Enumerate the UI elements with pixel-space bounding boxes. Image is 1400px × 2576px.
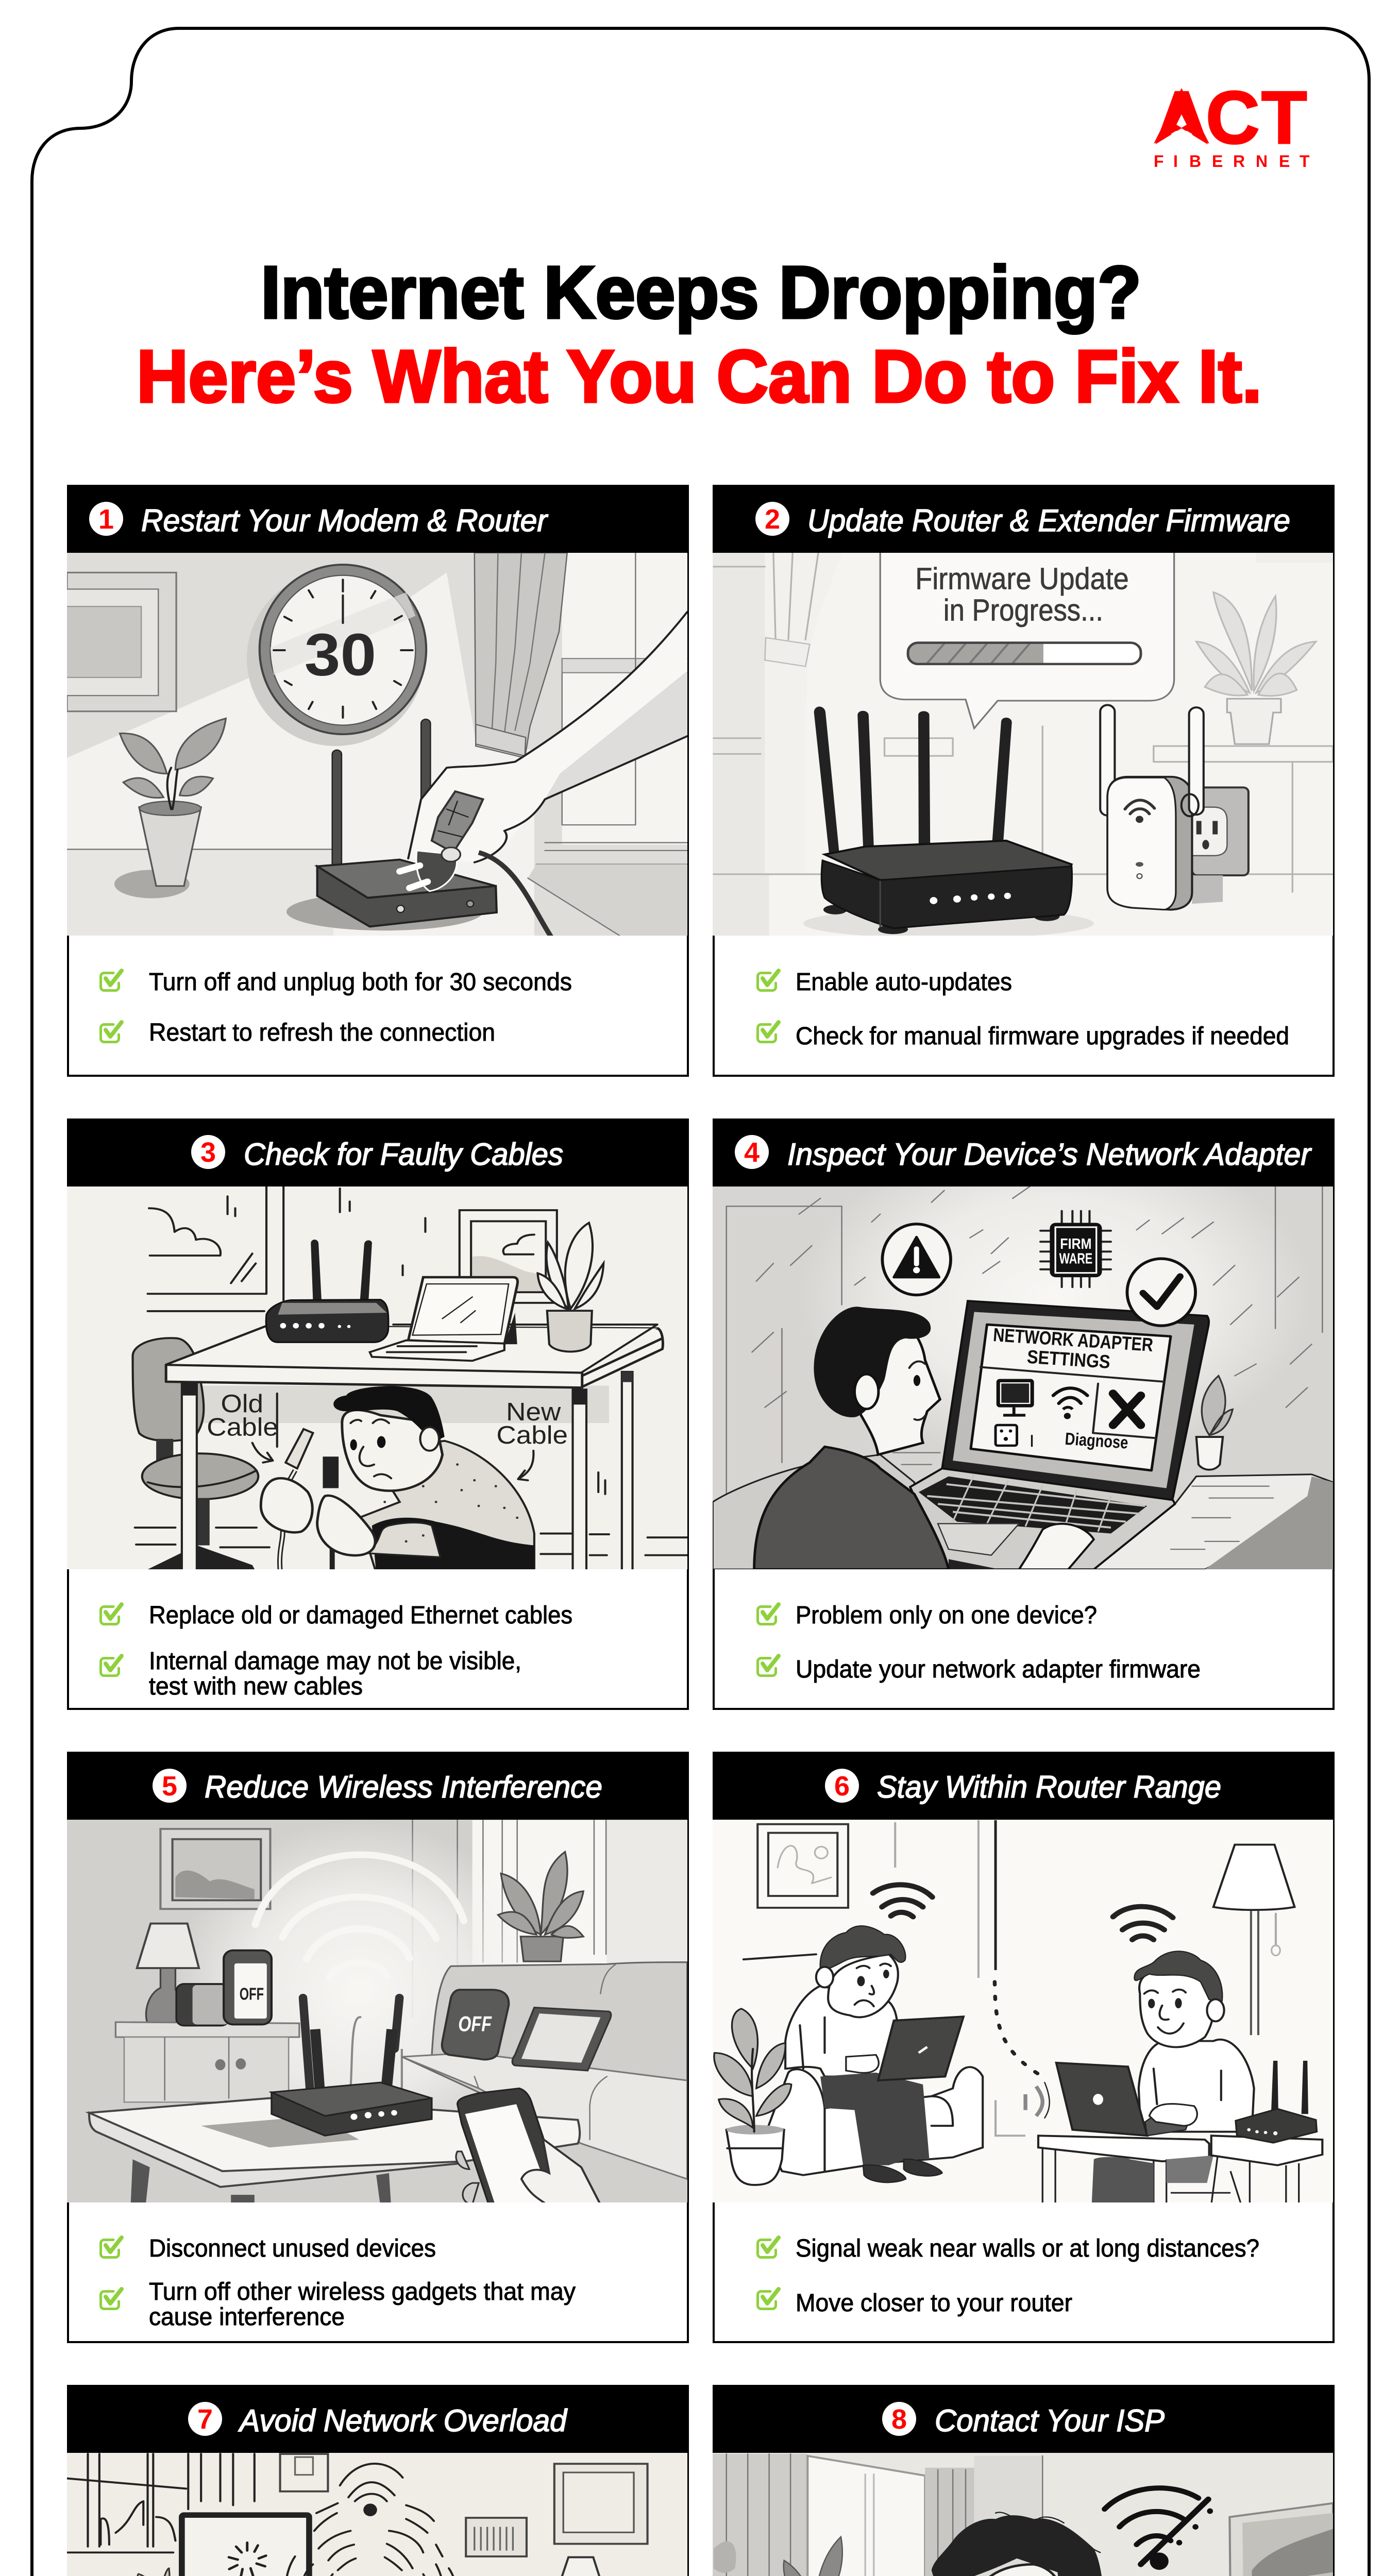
panel 8: contact ISP bbox=[701, 2385, 1385, 2576]
illustration: living room with router and wifi waves bbox=[52, 1816, 735, 2211]
panel 1: restart modem and router bbox=[52, 485, 735, 1076]
panel 1 header: 1 bbox=[98, 504, 114, 535]
panel 3 header: Check for Faulty Cables bbox=[244, 1137, 563, 1172]
bullet list bbox=[101, 1602, 572, 1700]
title: Internet Keeps Dropping? bbox=[261, 251, 1141, 334]
panel 4 header bbox=[713, 1118, 1335, 1187]
panel 7 header: Avoid Network Overload bbox=[238, 2403, 568, 2438]
bullet list: test with new cables bbox=[149, 1673, 363, 1700]
bullet list bbox=[101, 969, 572, 1046]
panel 6: router range bbox=[701, 1752, 1385, 2342]
panel 7: network overload bbox=[52, 2385, 735, 2576]
illustration: unplugging router with 30 second clock: 30 bbox=[305, 621, 376, 688]
title: Here’s What You Can Do to Fix It. bbox=[137, 335, 1262, 418]
illustration: living room with router and wifi waves: OFF bbox=[458, 2012, 492, 2036]
panel 7 header: 7 bbox=[197, 2404, 213, 2435]
bullet list: Move closer to your router bbox=[796, 2290, 1072, 2317]
logo: ACT Fibernet: FIBERNET bbox=[1154, 152, 1310, 171]
panel 8 header bbox=[713, 2385, 1335, 2453]
bullet list bbox=[757, 969, 1289, 1050]
bullet list: Replace old or damaged Ethernet cables bbox=[149, 1602, 572, 1629]
illustration: firmware update on router and extender: in Progress... bbox=[943, 594, 1103, 628]
panel 4 header: 4 bbox=[744, 1137, 760, 1168]
bullet list: Restart to refresh the connection bbox=[149, 1019, 495, 1046]
illustration: laptop with network adapter settings bbox=[713, 1187, 1333, 1569]
bullet list bbox=[101, 2235, 576, 2331]
panel 4 header: Inspect Your Device’s Network Adapter bbox=[787, 1137, 1312, 1172]
illustration: laptop with network adapter settings: SETTINGS bbox=[1026, 1346, 1111, 1373]
panel 5 header: 5 bbox=[162, 1771, 177, 1802]
illustration: person testing old and new cables under desk: Cable bbox=[496, 1421, 568, 1449]
panel 3: faulty cables bbox=[52, 1118, 735, 1709]
panel 2 header: 2 bbox=[765, 504, 780, 535]
bullet list bbox=[757, 1602, 1201, 1683]
illustration: laptop with network adapter settings: Diagnose bbox=[1064, 1429, 1129, 1452]
bullet list: Enable auto-updates bbox=[796, 969, 1012, 996]
bullet list: Signal weak near walls or at long distances? bbox=[796, 2235, 1259, 2262]
illustration: person testing old and new cables under desk: New bbox=[506, 1398, 561, 1426]
panel 6 header: 6 bbox=[834, 1771, 850, 1802]
illustration: firmware update on router and extender bbox=[713, 553, 1333, 936]
bullet list: Turn off and unplug both for 30 seconds bbox=[149, 969, 572, 996]
illustration: far and near router comparison bbox=[701, 1816, 1385, 2211]
panel 1 header bbox=[67, 485, 689, 553]
title bbox=[137, 251, 1262, 418]
panel 7 header bbox=[67, 2385, 689, 2453]
panel 3 header: 3 bbox=[200, 1137, 216, 1168]
panel 5: wireless interference bbox=[52, 1752, 735, 2342]
panel 2 header: Update Router & Extender Firmware bbox=[807, 503, 1290, 538]
panel 8 header: Contact Your ISP bbox=[935, 2403, 1165, 2438]
panel 4: network adapter bbox=[701, 1118, 1385, 1709]
bullet list: cause interference bbox=[149, 2303, 345, 2331]
illustration: person testing old and new cables under desk: Old bbox=[221, 1389, 263, 1417]
illustration: living room with router and wifi waves: OFF bbox=[240, 1985, 264, 2004]
panel 1 header: Restart Your Modem & Router bbox=[141, 503, 548, 538]
illustration: laptop with network adapter settings: NETWORK ADAPTER bbox=[992, 1324, 1154, 1356]
illustration: many devices around a router bbox=[52, 2450, 735, 2576]
illustration: firmware update on router and extender: Firmware Update bbox=[915, 562, 1129, 596]
bullet list: Check for manual firmware upgrades if needed bbox=[796, 1023, 1289, 1050]
panel 2 header bbox=[713, 485, 1335, 553]
panel 8 header: 8 bbox=[891, 2404, 907, 2435]
illustration: laptop with network adapter settings: FIRM bbox=[1060, 1236, 1092, 1252]
panel 6 header: Stay Within Router Range bbox=[877, 1770, 1221, 1804]
panel 5 header: Reduce Wireless Interference bbox=[205, 1770, 602, 1804]
panel 5 header bbox=[67, 1752, 689, 1820]
panel 3 header bbox=[67, 1118, 689, 1187]
bullet list: Problem only on one device? bbox=[796, 1602, 1097, 1629]
illustration: person testing old and new cables under desk bbox=[67, 1187, 687, 1569]
bullet list: Disconnect unused devices bbox=[149, 2235, 436, 2262]
panel 6 header bbox=[713, 1752, 1335, 1820]
illustration: unplugging router with 30 second clock bbox=[67, 553, 687, 936]
bullet list bbox=[757, 2235, 1259, 2317]
bullet list: Update your network adapter firmware bbox=[796, 1656, 1201, 1683]
illustration: worried person calling provider bbox=[701, 2450, 1385, 2576]
bullet list: Turn off other wireless gadgets that may bbox=[149, 2278, 576, 2306]
illustration: person testing old and new cables under desk: Cable bbox=[207, 1413, 278, 1441]
panel 2: update firmware bbox=[701, 485, 1385, 1076]
logo: ACT Fibernet: ACT bbox=[1155, 76, 1307, 159]
illustration: laptop with network adapter settings: WARE bbox=[1059, 1250, 1092, 1267]
bullet list: Internal damage may not be visible, bbox=[149, 1648, 521, 1675]
